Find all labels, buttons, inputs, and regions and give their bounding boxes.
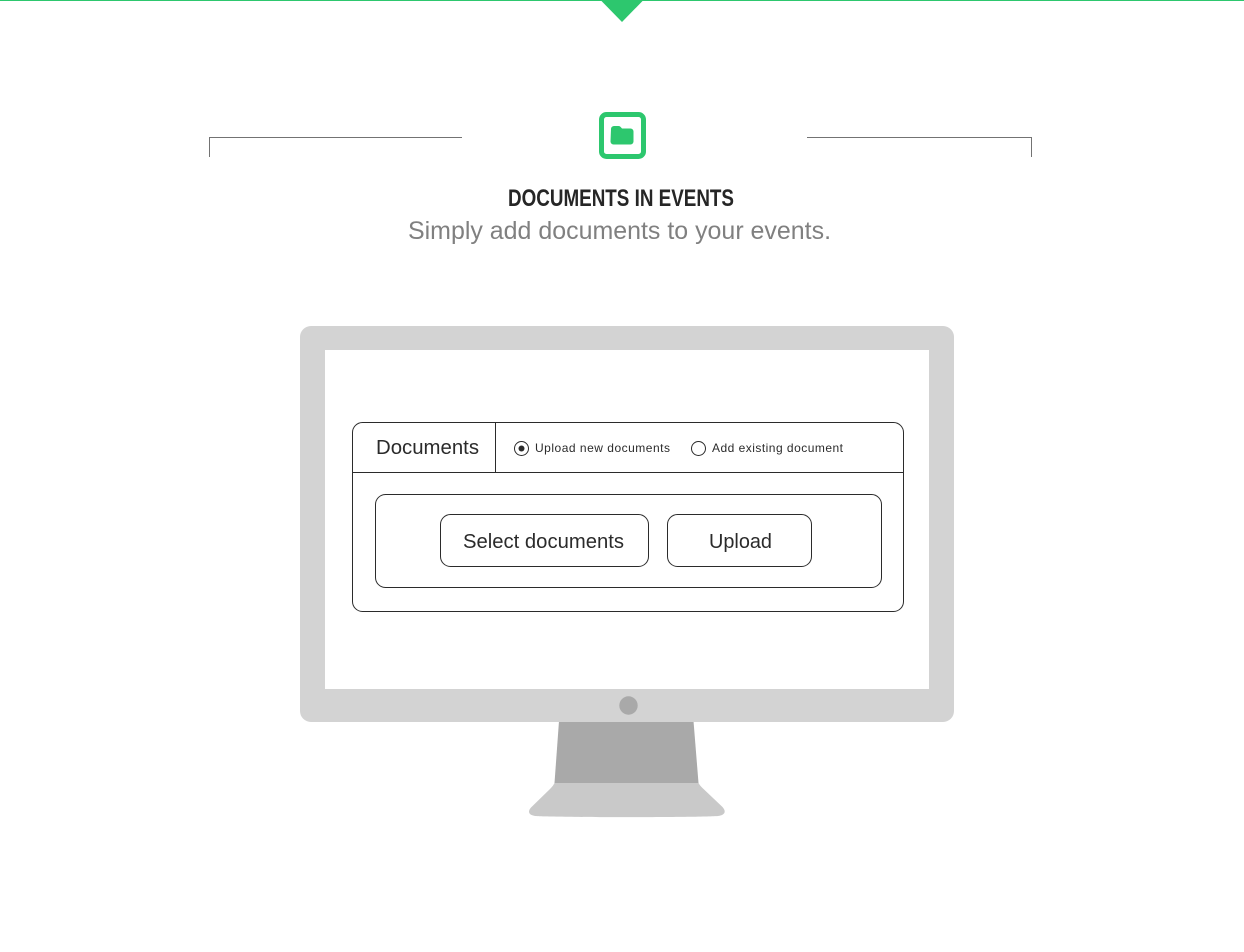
header bracket: right xyxy=(807,138,1032,157)
monitor frame xyxy=(300,326,954,722)
panel: documents form xyxy=(352,422,904,612)
monitor screen xyxy=(325,350,929,689)
button: select documents: Select documents xyxy=(463,531,624,553)
radio option: add existing document: Add existing document xyxy=(712,441,844,455)
button: upload: Upload xyxy=(709,531,772,553)
subtitle: Simply add documents to your events. xyxy=(408,217,831,245)
header bracket: left xyxy=(210,138,462,157)
form label: documents: Documents xyxy=(376,437,479,459)
top banner notch xyxy=(0,0,1244,22)
monitor camera dot xyxy=(619,696,638,715)
monitor stand base xyxy=(529,783,725,817)
button: upload xyxy=(668,514,812,566)
monitor stand neck xyxy=(554,721,698,783)
monitor illustration xyxy=(300,326,954,817)
radio option: upload new documents: Upload new documents xyxy=(535,441,670,455)
upload area box xyxy=(376,494,882,588)
icon: folder xyxy=(602,114,644,156)
title: DOCUMENTS IN EVENTS xyxy=(508,185,734,212)
button: select documents xyxy=(440,514,648,566)
